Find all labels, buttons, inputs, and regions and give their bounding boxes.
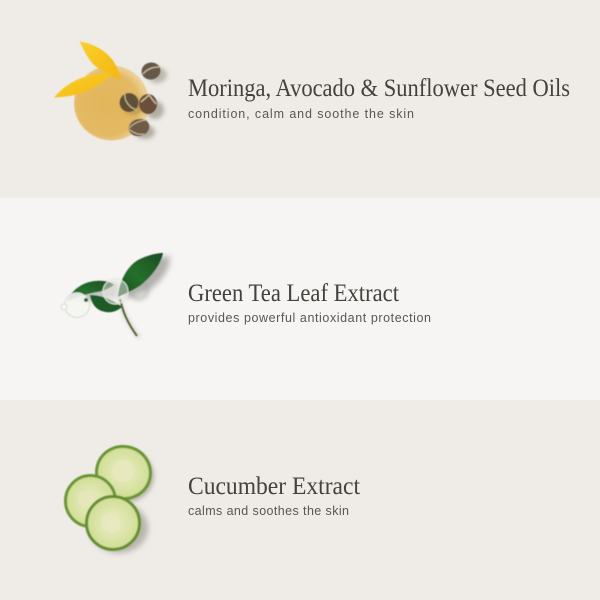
text: provides powerful antioxidant protection: provides powerful antioxidant protection (188, 311, 431, 325)
heading: green tea leaf extract: Green Tea Leaf Extract (188, 278, 399, 307)
icon: oil drop with petals and seeds (54, 42, 167, 140)
panel: cucumber extract (0, 400, 600, 600)
heading: cucumber extract: Cucumber Extract (188, 471, 360, 500)
panel: moringa, avocado and sunflower seed oils (0, 0, 600, 198)
text: condition, calm and soothe the skin: condition, calm and soothe the skin (188, 107, 414, 121)
text: calms and soothes the skin: calms and soothes the skin (188, 504, 349, 518)
icon: green tea leaves with water droplets (61, 253, 170, 338)
icon: cucumber slices (66, 440, 156, 553)
panel: green tea leaf extract (0, 198, 600, 400)
